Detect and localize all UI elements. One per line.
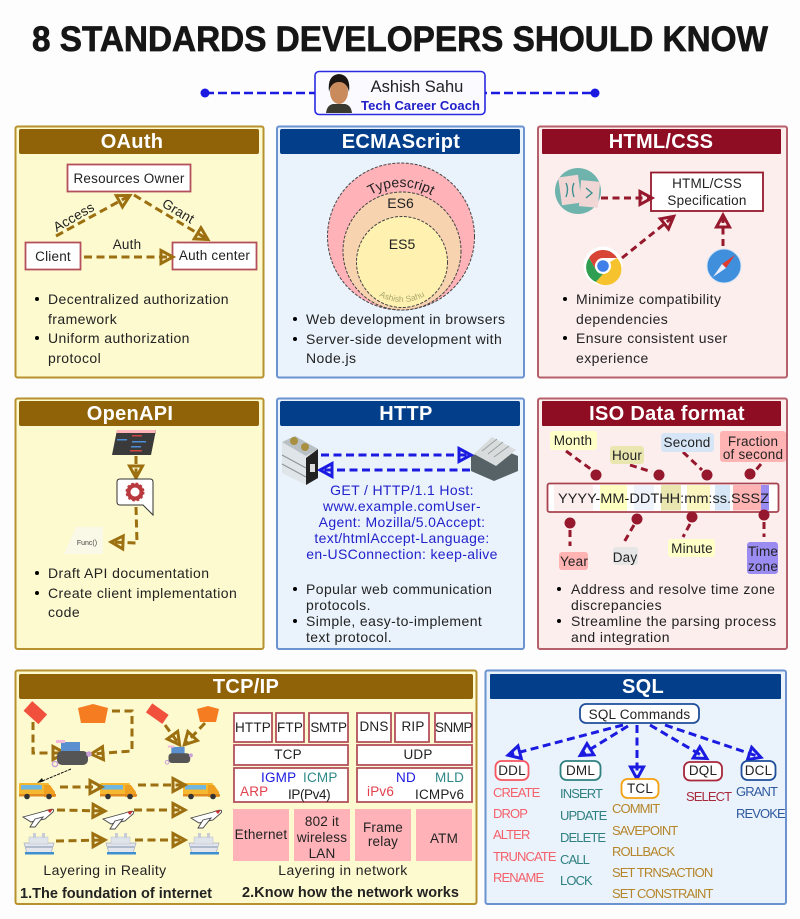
diagram: layering in network: ICMPv6 <box>415 787 464 802</box>
label: Fraction of second: of second <box>723 447 783 462</box>
group: DML: CALL <box>560 852 590 867</box>
group: DDL: DROP <box>493 806 527 821</box>
group: DCL: REVOKE <box>736 806 786 821</box>
author badge: Tech Career Coach <box>361 98 480 113</box>
author badge <box>200 72 600 114</box>
icon: Safari <box>707 249 741 283</box>
bullet list: OAuth <box>35 291 229 366</box>
diagram: timestamp <box>548 431 786 574</box>
diagram: layering in network: HTTP <box>235 720 271 735</box>
diagram: SQL command tree: SQL Commands <box>589 707 690 722</box>
label: Fraction of second: Fraction <box>728 434 778 449</box>
diagram: layering in reality <box>19 701 222 902</box>
group: TCL: SAVEPOINT <box>612 823 678 838</box>
heading: OAuth: OAuth <box>101 131 163 153</box>
icon: buses <box>19 783 220 799</box>
group: TCL <box>612 779 714 901</box>
panel: HTTP <box>277 398 524 649</box>
diagram: layering in reality: 1.The foundation of internet <box>20 886 212 902</box>
group: DML: DELETE <box>560 830 606 845</box>
bullet list: ECMAScript: Server-side development with <box>306 331 502 347</box>
group: DDL: DDL <box>498 763 526 778</box>
bullet list: ECMAScript: Web development in browsers <box>306 311 505 327</box>
heading: HTTP: HTTP <box>379 403 433 425</box>
diagram: OAuth flow: Auth center <box>179 248 250 263</box>
group: DML: LOCK <box>560 873 593 888</box>
request text: text/htmlAccept-Language: <box>314 530 490 546</box>
group: DCL: GRANT <box>736 784 778 799</box>
icon: planes <box>23 809 222 829</box>
icon: code documents <box>555 168 601 214</box>
bullet list: OpenAPI: code <box>48 604 80 620</box>
request text: www.example.comUser- <box>322 498 481 514</box>
heading: OAuth <box>19 129 259 154</box>
diagram: layering in network: ARP <box>240 784 268 799</box>
group: TCL: TCL <box>627 781 653 796</box>
diagram: layering in network: SMTP <box>310 720 347 735</box>
diagram: SQL command tree <box>493 704 786 901</box>
bullet list: ISO: Streamline the parsing process <box>571 613 777 629</box>
icon: file drawer <box>471 437 518 481</box>
title: 8 STANDARDS DEVELOPERS SHOULD KNOW <box>32 20 768 59</box>
heading: ISO Data format: ISO Data format <box>589 403 745 425</box>
bullet list: OAuth: framework <box>48 311 118 327</box>
group: DCL: DCL <box>745 763 773 778</box>
request text: GET / HTTP/1.1 Host: <box>330 482 474 498</box>
bullet list: HTTP <box>293 581 492 645</box>
bullet list: OAuth: protocol <box>48 350 101 366</box>
group: TCL: ROLLBACK <box>612 844 675 859</box>
bullet list: OpenAPI: Draft API documentation <box>48 565 209 581</box>
group: DML: INSERT <box>560 786 603 801</box>
diagram: OAuth flow: Grant <box>160 196 197 227</box>
diagram: layering in network: ND <box>396 770 416 785</box>
diagram: nested circles <box>327 162 475 310</box>
diagram: nested circles: ES5 <box>389 236 415 252</box>
label: Hour: Hour <box>612 448 642 463</box>
panel: TCP/IP <box>16 670 476 904</box>
group: DDL: CREATE <box>493 785 541 800</box>
bullet list: HTTP: Popular web communication <box>306 581 492 597</box>
bullet list: OpenAPI: Create client implementation <box>48 585 237 601</box>
bullet list: HTML/CSS <box>563 291 728 366</box>
diagram: layering in network: relay <box>368 834 398 849</box>
group: DML <box>560 761 608 888</box>
label: Time zone: zone <box>748 559 778 574</box>
label: Fraction of second <box>720 431 786 462</box>
icon: envelopes and boxes <box>24 701 219 724</box>
diagram: nested circles: ES6 <box>387 195 414 211</box>
bullet list: HTTP: Simple, easy-to-implement <box>306 613 482 629</box>
label: Second: Second <box>664 435 710 450</box>
diagram: OpenAPI flow <box>64 430 156 554</box>
bullet list: ISO: and integration <box>571 629 670 645</box>
panel: ECMAScript <box>276 126 525 378</box>
diagram: specification: Specification <box>667 193 747 208</box>
diagram: layering in network: Layering in network <box>278 862 408 878</box>
heading: ECMAScript <box>280 129 520 154</box>
label: Month <box>550 431 597 450</box>
heading: ECMAScript: ECMAScript <box>342 131 460 153</box>
diagram: layering in network: ATM <box>430 831 458 846</box>
diagram: layering in network: 2.Know how the network works <box>242 885 459 901</box>
heading: SQL <box>490 674 781 699</box>
label: Time zone <box>747 542 778 574</box>
heading: ISO Data format <box>542 401 781 426</box>
diagram: specification <box>555 168 763 286</box>
icon: ships <box>24 833 219 854</box>
bullet list: HTML/CSS: dependencies <box>576 311 668 327</box>
diagram: layering in network: 802 it <box>305 814 339 829</box>
panel: HTML/CSS <box>538 126 787 378</box>
group: DCL <box>736 761 786 821</box>
group: DDL: ALTER <box>493 827 530 842</box>
bullet list: HTML/CSS: experience <box>576 350 649 366</box>
diagram: layering in network: IGMP <box>261 770 296 785</box>
diagram: timestamp: YYYY-MM-DDTHH:mm:ss.SSSZ <box>558 490 769 506</box>
panel: OAuth <box>16 126 264 378</box>
bullet list: HTML/CSS: Ensure consistent user <box>576 330 728 346</box>
diagram: layering in network: LAN <box>309 846 335 861</box>
diagram: layering in network: Frame <box>363 820 403 835</box>
bullet list: ISO <box>557 581 777 645</box>
panel: ISO Data format <box>538 398 787 649</box>
diagram: OAuth flow: Client <box>35 249 71 264</box>
request text: en-USConnection: keep-alive <box>306 546 498 562</box>
bullet list: OAuth: Decentralized authorization <box>48 291 229 307</box>
diagram: OAuth flow <box>26 164 256 270</box>
bullet list: ECMAScript: Node.js <box>306 350 356 366</box>
bullet list: HTML/CSS: Minimize compatibility <box>576 291 721 307</box>
label: Month: Month <box>554 433 592 448</box>
diagram: layering in network: SNMP <box>435 720 472 735</box>
icon: Func(): Func() <box>77 540 97 547</box>
icon: editor screenshot <box>112 430 156 455</box>
bullet list: OpenAPI <box>35 565 237 620</box>
request text <box>306 482 498 562</box>
label: Minute: Minute <box>671 541 713 556</box>
diagram: nested circles: Ashish Sahu <box>379 292 424 302</box>
diagram: HTTP exchange <box>282 436 518 485</box>
group: DML: DML <box>566 763 595 778</box>
heading: SQL: SQL <box>622 676 664 698</box>
group: DDL: RENAME <box>493 870 544 885</box>
bullet list: ECMAScript <box>293 311 505 366</box>
request text: Agent: Mozilla/5.0Accept: <box>319 514 485 530</box>
heading: HTML/CSS: HTML/CSS <box>609 131 713 153</box>
diagram: layering in network: TCP <box>274 747 302 762</box>
group: DQL <box>684 762 732 804</box>
icon: client server <box>282 436 318 485</box>
diagram: OAuth flow: Access <box>51 199 97 235</box>
diagram: layering in network: wireless <box>296 830 347 845</box>
diagram: layering in network <box>233 713 472 901</box>
bullet list: OAuth: Uniform authorization <box>48 330 190 346</box>
bullet list: HTTP: protocols. <box>306 597 371 613</box>
heading: TCP/IP <box>19 674 473 699</box>
group: TCL: SET CONSTRAINT <box>612 886 714 901</box>
diagram: OAuth flow: Resources Owner <box>73 171 185 186</box>
panel: OpenAPI <box>16 398 264 649</box>
heading: HTTP <box>280 401 520 426</box>
diagram: OAuth flow: Auth <box>113 237 141 252</box>
diagram: layering in reality: Layering in Reality <box>43 862 167 878</box>
group: DQL: SELECT <box>686 789 732 804</box>
diagram: layering in network: FTP <box>277 720 303 735</box>
bullet list: HTTP: text protocol. <box>306 629 392 645</box>
label: Year: Year <box>560 554 588 569</box>
diagram: layering in network: DNS <box>359 719 389 734</box>
diagram: layering in network: UDP <box>403 747 433 762</box>
heading: TCP/IP: TCP/IP <box>213 676 279 698</box>
label: Day: Day <box>613 550 637 565</box>
label: Time zone: Time <box>748 544 778 559</box>
diagram: layering in network: iPv6 <box>367 784 394 799</box>
heading: HTML/CSS <box>542 129 781 154</box>
group: TCL: SET TRNSACTION <box>612 865 713 880</box>
diagram: nested circles: Typescript <box>366 180 435 196</box>
bullet list: ISO: Address and resolve time zone <box>571 581 775 597</box>
author badge: Ashish Sahu <box>371 78 463 96</box>
group: TCL: COMMIT <box>612 801 660 816</box>
icon: Chrome <box>584 246 622 286</box>
group: DDL: TRUNCATE <box>493 849 557 864</box>
bullet list: ISO: discrepancies <box>571 597 662 613</box>
diagram: specification: HTML/CSS <box>672 176 742 191</box>
heading: OpenAPI <box>19 401 259 426</box>
icon: postal workers <box>52 740 193 767</box>
diagram: layering in network: RIP <box>401 719 425 734</box>
diagram: layering in network: IP(Pv4) <box>288 787 330 802</box>
panel: SQL <box>486 670 786 904</box>
group: DDL <box>493 761 557 885</box>
group: DQL: DQL <box>689 763 717 778</box>
icon: gear bubble <box>117 479 153 515</box>
diagram: layering in network: Ethernet <box>235 827 287 842</box>
group: DML: UPDATE <box>560 808 608 823</box>
diagram: layering in network: MLD <box>435 770 464 785</box>
heading: OpenAPI: OpenAPI <box>87 403 173 425</box>
diagram: layering in network: ICMP <box>303 770 338 785</box>
